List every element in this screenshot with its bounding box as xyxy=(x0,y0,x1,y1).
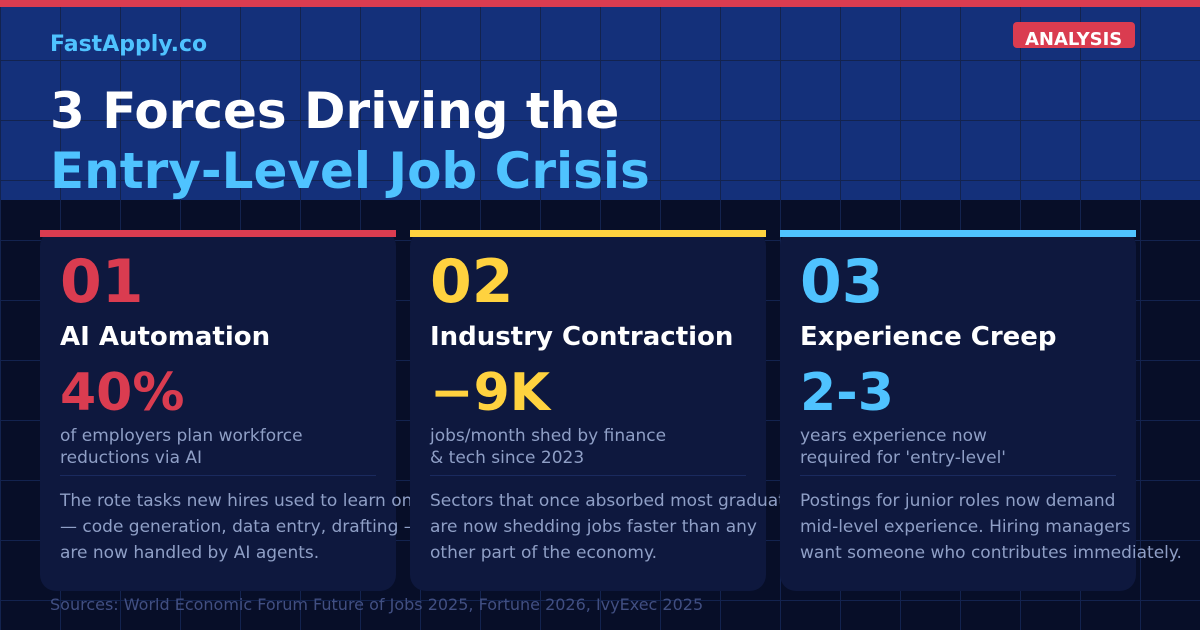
card number 03: 03 xyxy=(800,247,884,317)
stat description: & tech since 2023 xyxy=(430,448,584,468)
body text: mid-level experience. Hiring managers xyxy=(800,517,1131,537)
body text: want someone who contributes immediately. xyxy=(800,543,1182,563)
statistic -9K: −9K xyxy=(430,363,552,423)
panel: industry contraction xyxy=(410,230,804,591)
body text: Postings for junior roles now demand xyxy=(800,491,1115,511)
card heading: AI Automation xyxy=(60,322,270,352)
body text: The rote tasks new hires used to learn on xyxy=(59,491,412,511)
panel: AI automation xyxy=(40,230,421,591)
panel: experience creep xyxy=(780,230,1182,591)
body text: — code generation, data entry, drafting — xyxy=(60,517,421,537)
stat description: jobs/month shed by finance xyxy=(429,426,666,446)
stat description: reductions via AI xyxy=(60,448,202,468)
statistic 2-3: 2-3 xyxy=(800,363,894,423)
body text: are now handled by AI agents. xyxy=(60,543,319,563)
card heading: Industry Contraction xyxy=(430,322,733,352)
source footnote: Sources: World Economic Forum Future of Jobs 2025, Fortune 2026, IvyExec 2025 xyxy=(50,595,703,614)
card number 02: 02 xyxy=(430,247,514,317)
brand name: FastApply.co xyxy=(50,32,207,57)
badge: analysis: ANALYSIS xyxy=(1025,29,1122,50)
stat description: years experience now xyxy=(800,426,987,446)
title: Entry-Level Job Crisis xyxy=(50,142,650,200)
body text: other part of the economy. xyxy=(430,543,657,563)
card number 01: 01 xyxy=(60,247,144,317)
stat description: required for 'entry-level' xyxy=(800,448,1006,468)
stat description: of employers plan workforce xyxy=(60,426,303,446)
top accent bar xyxy=(0,0,1200,7)
title: 3 Forces Driving the xyxy=(50,82,619,140)
body text: Sectors that once absorbed most graduates xyxy=(430,491,804,511)
badge: analysis xyxy=(1013,22,1135,50)
title xyxy=(50,82,650,200)
body text: are now shedding jobs faster than any xyxy=(430,517,757,537)
statistic 40%: 40% xyxy=(60,363,184,423)
card heading: Experience Creep xyxy=(800,322,1057,352)
